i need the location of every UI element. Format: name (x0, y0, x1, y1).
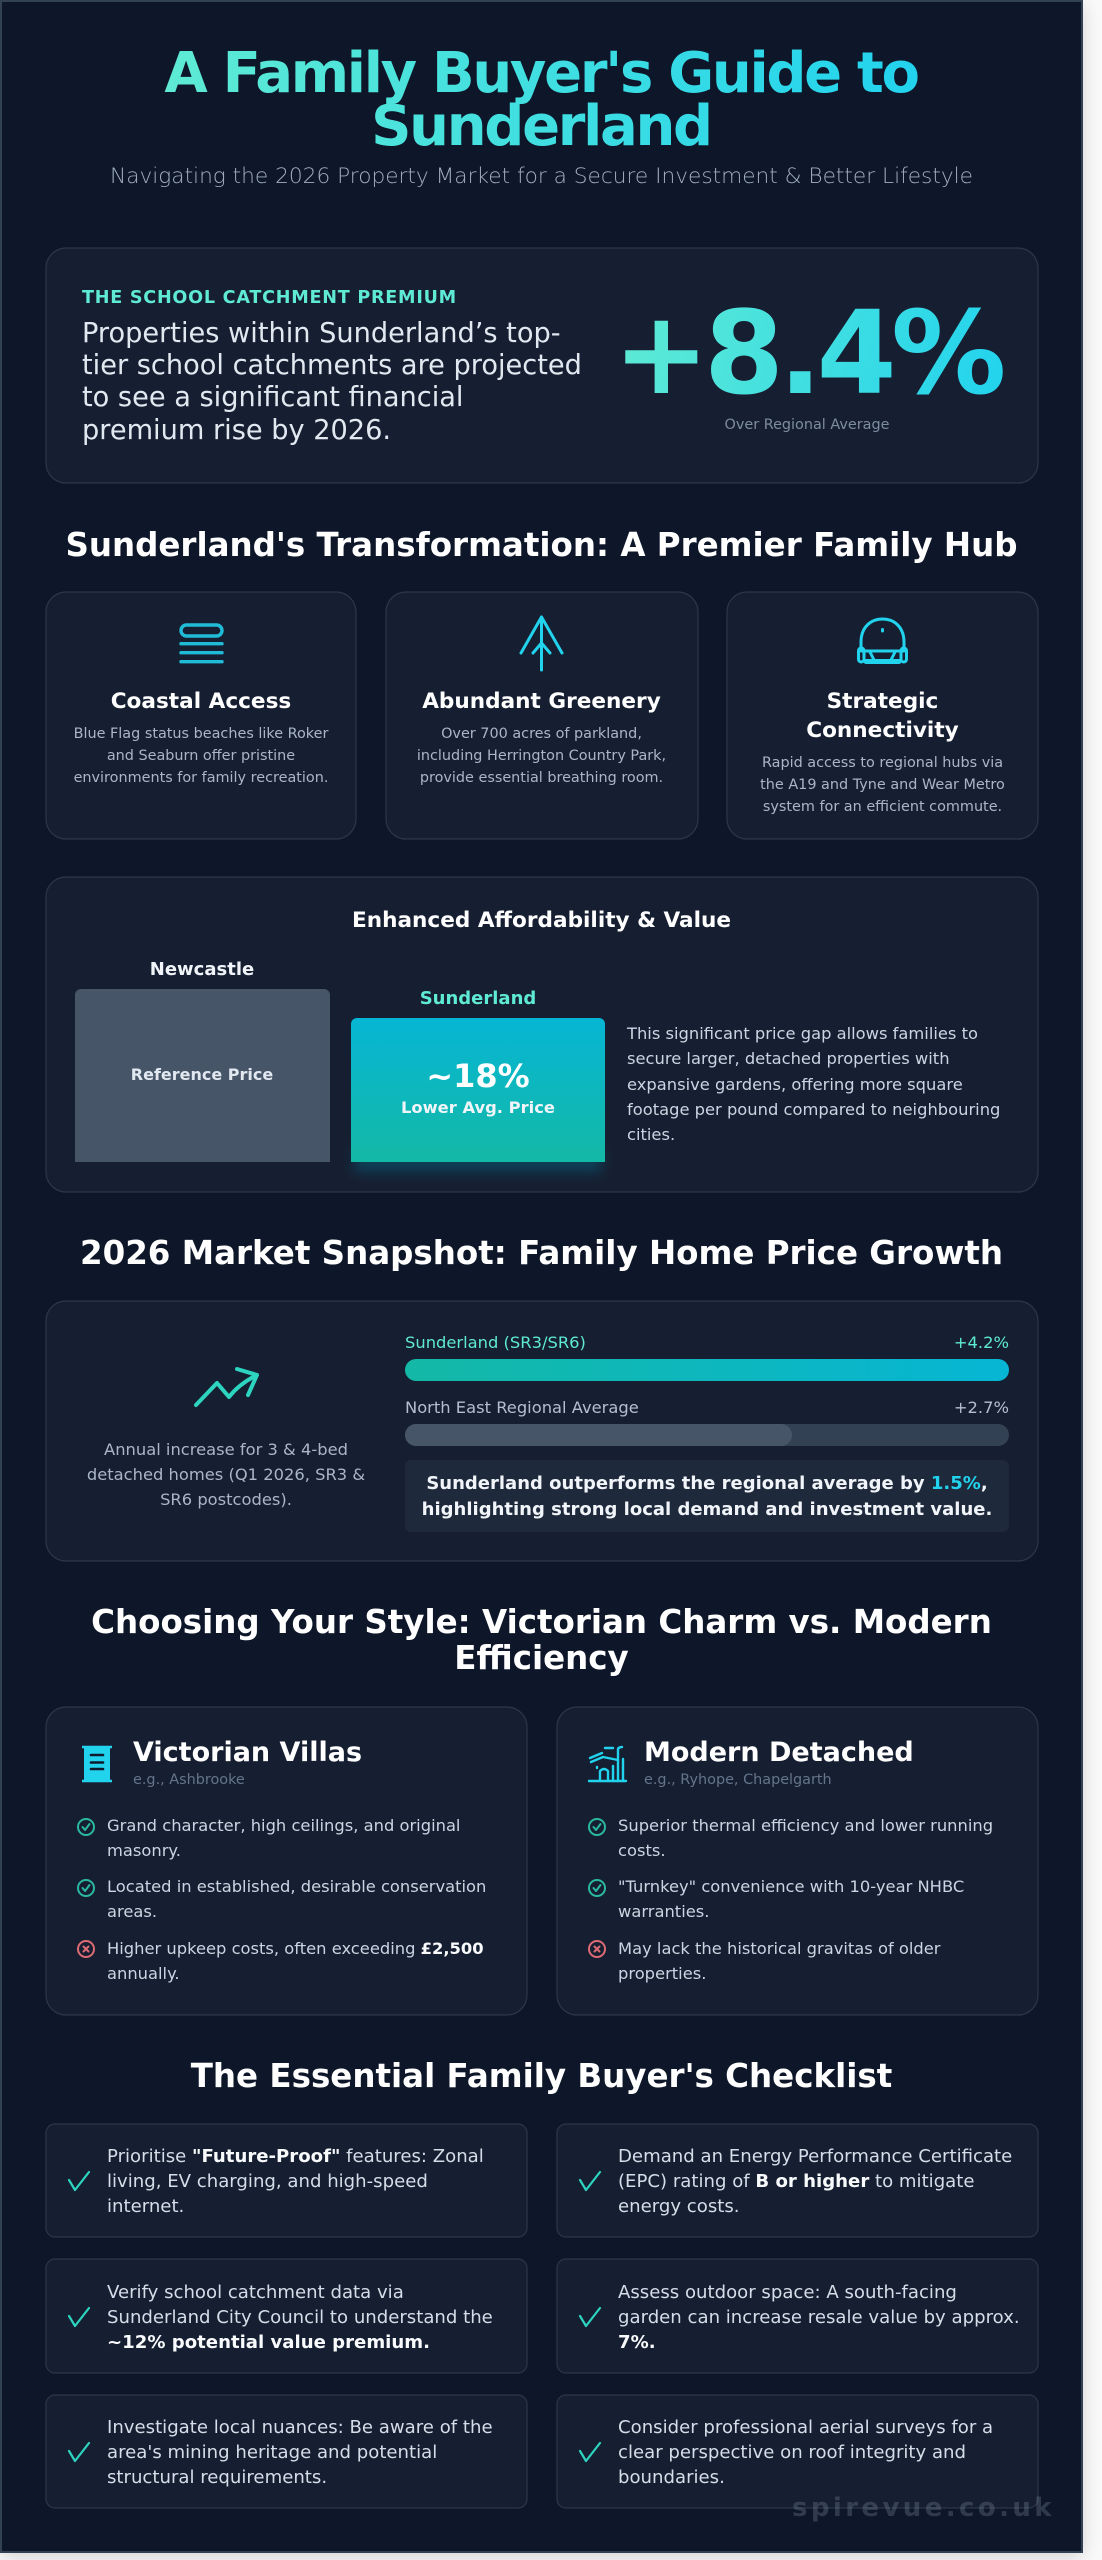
snapshot caption (87, 1440, 365, 1509)
snapshot caption: detached homes (Q1 2026, SR3 & (87, 1465, 365, 1484)
checklist item 1: internet. (107, 2196, 184, 2217)
checklist item 5 (46, 2395, 527, 2508)
panel: market snapshot (46, 1301, 1038, 1561)
connectivity title: Connectivity (806, 718, 959, 743)
coastal title: Coastal Access (111, 689, 291, 714)
greenery description: provide essential breathing room. (420, 770, 663, 786)
affordability heading: Enhanced Affordability & Value (352, 908, 731, 933)
heading: choosing your style: Efficiency (454, 1639, 629, 1677)
Victorian list: Higher upkeep costs, often exceeding £2,500 (107, 1939, 484, 1958)
affordability text: expansive gardens, offering more square (627, 1075, 963, 1094)
icon: Victorian building (82, 1747, 112, 1781)
hero text: to see a significant financial (82, 382, 464, 413)
title: A Family Buyer's Guide to (164, 41, 918, 106)
checklist item 2: energy costs. (618, 2196, 740, 2217)
title (164, 41, 918, 159)
coastal description: environments for family recreation. (74, 770, 328, 786)
checklist item 1 (46, 2124, 527, 2237)
heading: transformation: Sunderland's Transformation: A Premier Family Hub (65, 526, 1018, 564)
panel: abundant greenery (386, 592, 698, 839)
Victorian title: Victorian Villas (133, 1737, 362, 1768)
checklist item 3 (46, 2259, 527, 2373)
bar: Sunderland (351, 988, 605, 1172)
checklist item 3: Verify school catchment data via (107, 2282, 404, 2303)
modern list: properties. (618, 1964, 706, 1983)
hero text: tier school catchments are projected (82, 350, 582, 381)
connectivity description: system for an efficient commute. (763, 799, 1002, 815)
bar: Sunderland: Lower Avg. Price (401, 1098, 555, 1117)
Victorian list: Located in established, desirable conservation (107, 1877, 486, 1896)
coastal description: and Seaburn offer pristine (107, 748, 295, 764)
panel: school catchment premium (46, 248, 1038, 483)
callout (405, 1460, 1009, 1532)
greenery description: including Herrington Country Park, (417, 748, 666, 764)
panel: affordability (46, 877, 1038, 1192)
heading: choosing your style (91, 1603, 992, 1677)
checklist item 5: structural requirements. (107, 2467, 327, 2488)
modern list (589, 1816, 993, 1983)
modern location: e.g., Ryhope, Chapelgarth (644, 1772, 832, 1788)
snapshot caption: SR6 postcodes). (160, 1490, 292, 1509)
bar chart: Sunderland growth (405, 1333, 1009, 1381)
bar: Sunderland: Sunderland (420, 988, 536, 1009)
checklist item 1: living, EV charging, and high-speed (107, 2171, 428, 2192)
checklist item 6 (557, 2395, 1038, 2508)
affordability text: This significant price gap allows families to (626, 1024, 978, 1043)
greenery description (417, 726, 666, 786)
panel: coastal access (46, 592, 356, 839)
Victorian list: annually. (107, 1964, 180, 1983)
checklist item 4 (557, 2259, 1038, 2373)
heading: choosing your style: Choosing Your Style: Victorian Charm vs. Modern (91, 1603, 992, 1641)
icon: tree (521, 617, 562, 670)
checklist item 4: garden can increase resale value by approx. (618, 2307, 1020, 2328)
Victorian list (78, 1816, 486, 1983)
checklist item 6: boundaries. (618, 2467, 725, 2488)
greenery description: Over 700 acres of parkland, (441, 726, 642, 742)
checklist item 6: Consider professional aerial surveys for a (618, 2417, 993, 2438)
connectivity description: Rapid access to regional hubs via (762, 755, 1003, 771)
heading: market snapshot: 2026 Market Snapshot: Family Home Price Growth (80, 1234, 1003, 1272)
coastal description: Blue Flag status beaches like Roker (74, 726, 328, 742)
icon: tick (589, 1880, 605, 1896)
snapshot caption: Annual increase for 3 & 4-bed (104, 1440, 348, 1459)
icon: tick (78, 1819, 94, 1835)
Victorian list: areas. (107, 1902, 157, 1921)
checklist item 4: 7%. (618, 2332, 656, 2353)
title: Sunderland (371, 94, 711, 159)
icon: modern house (589, 1747, 626, 1781)
icon: waves (181, 625, 222, 662)
checklist item 2: Demand an Energy Performance Certificate (618, 2146, 1012, 2167)
connectivity title: Strategic (827, 689, 938, 714)
heading: checklist: The Essential Family Buyer's Checklist (191, 2057, 892, 2095)
icon: cross (589, 1941, 605, 1957)
affordability text: cities. (627, 1125, 675, 1144)
checklist item 6: clear perspective on roof integrity and (618, 2442, 966, 2463)
stat caption: Over Regional Average (725, 417, 890, 433)
callout: Sunderland outperforms the regional average by 1.5%, (426, 1473, 988, 1494)
Victorian location: e.g., Ashbrooke (133, 1772, 245, 1788)
icon: tick (78, 1880, 94, 1896)
checklist item 3: Sunderland City Council to understand the (107, 2307, 493, 2328)
hero text: premium rise by 2026. (82, 415, 391, 446)
modern list: Superior thermal efficiency and lower running (618, 1816, 993, 1835)
panel: Victorian villas (46, 1707, 527, 2015)
bar chart: Sunderland growth: Sunderland (SR3/SR6) (405, 1333, 586, 1352)
greenery title: Abundant Greenery (422, 689, 661, 714)
checklist item 5: Investigate local nuances: Be aware of the (107, 2417, 493, 2438)
hero text: Properties within Sunderland’s top- (82, 318, 561, 349)
bar chart: Sunderland growth: +4.2% (954, 1333, 1009, 1352)
subtitle: Navigating the 2026 Property Market for a Secure Investment & Better Lifestyle (110, 164, 973, 189)
stat: +8.4%: +8.4% (613, 287, 1003, 421)
Victorian list: Grand character, high ceilings, and original (107, 1816, 460, 1835)
icon: trend arrow (196, 1369, 257, 1405)
panel: strategic connectivity (727, 592, 1038, 839)
hero text (82, 318, 582, 446)
coastal description (74, 726, 328, 786)
bar chart: North East growth (405, 1398, 1009, 1446)
affordability text: footage per pound compared to neighbouring (627, 1100, 1000, 1119)
bar: Sunderland: ~18% (426, 1057, 530, 1095)
bar chart: North East growth: +2.7% (954, 1398, 1009, 1417)
icon: cross (78, 1941, 94, 1957)
modern title: Modern Detached (644, 1737, 914, 1768)
connectivity title (806, 689, 959, 743)
affordability text (626, 1024, 1000, 1144)
modern list: warranties. (618, 1902, 709, 1921)
watermark: spirevue.co.uk (792, 2493, 1055, 2523)
icon: tick (589, 1819, 605, 1835)
modern list: costs. (618, 1841, 666, 1860)
checklist item 3: ~12% potential value premium. (107, 2332, 430, 2353)
modern list: "Turnkey" convenience with 10-year NHBC (618, 1877, 964, 1896)
checklist item 5: area's mining heritage and potential (107, 2442, 437, 2463)
hero label: THE SCHOOL CATCHMENT PREMIUM (82, 288, 457, 308)
icon: metro train (858, 619, 906, 662)
connectivity description: the A19 and Tyne and Wear Metro (760, 777, 1005, 793)
Victorian list: masonry. (107, 1841, 181, 1860)
bar: Newcastle (75, 959, 330, 1162)
checklist item 2: (EPC) rating of B or higher to mitigate (618, 2171, 974, 2192)
bar: Newcastle: Reference Price (131, 1065, 273, 1084)
modern list: May lack the historical gravitas of older (618, 1939, 941, 1958)
connectivity description (760, 755, 1005, 815)
panel: modern detached (557, 1707, 1038, 2015)
affordability text: secure larger, detached properties with (627, 1049, 950, 1068)
checklist item 2 (557, 2124, 1038, 2237)
checklist item 1: Prioritise "Future-Proof" features: Zonal (107, 2146, 484, 2167)
checklist item 4: Assess outdoor space: A south-facing (618, 2282, 957, 2303)
bar: Newcastle: Newcastle (150, 959, 254, 980)
callout: highlighting strong local demand and investment value. (422, 1499, 992, 1520)
bar chart: North East growth: North East Regional Average (405, 1398, 639, 1417)
